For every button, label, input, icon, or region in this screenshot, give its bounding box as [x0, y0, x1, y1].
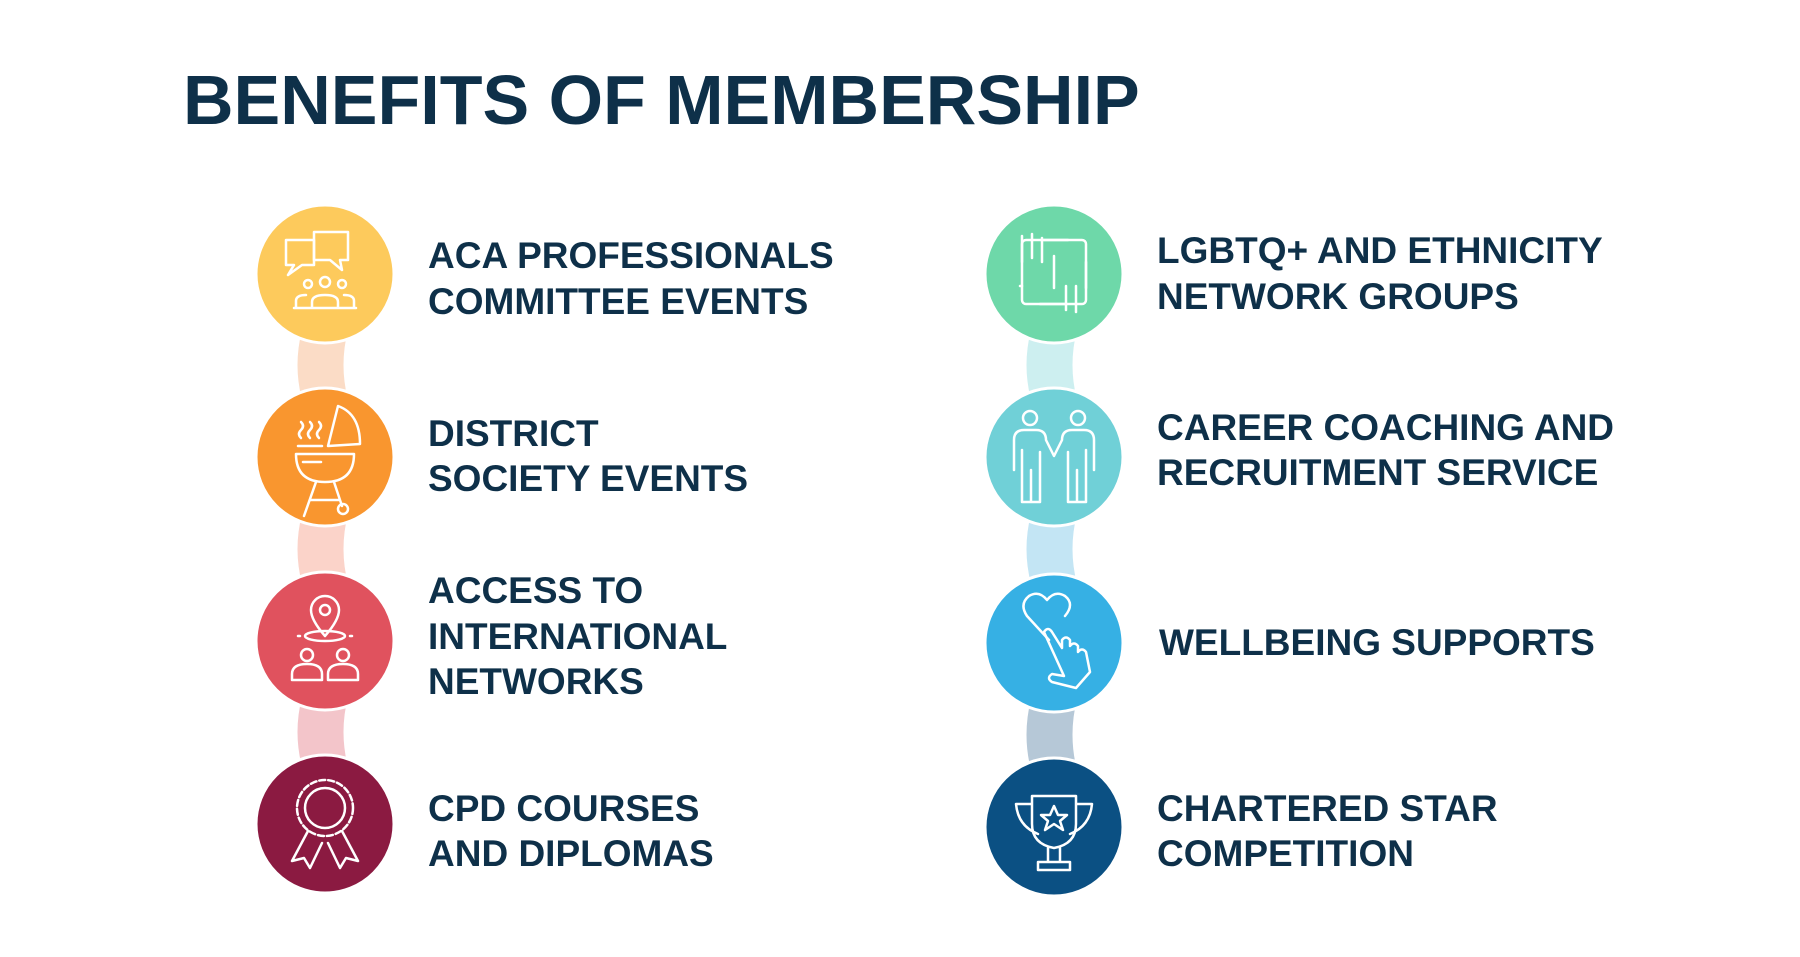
text: committee events — [428, 235, 834, 322]
text: chartered star: CHARTERED STAR — [1157, 788, 1498, 829]
text: career: RECRUITMENT SERVICE — [1157, 452, 1598, 493]
icon: trophy — [985, 758, 1123, 896]
title: BENEFITS OF MEMBERSHIP — [183, 61, 1140, 139]
text: district: SOCIETY EVENTS — [428, 458, 748, 499]
icon: hands — [985, 205, 1123, 343]
icon: heart hand — [985, 574, 1123, 712]
text: committee events: COMMITTEE EVENTS — [428, 281, 808, 322]
icon: international — [256, 572, 394, 710]
text: international: NETWORKS — [428, 661, 644, 702]
icon: bbq — [256, 388, 394, 526]
text: chartered star: COMPETITION — [1157, 833, 1414, 874]
connectors right — [1026, 330, 1077, 770]
text: wellbeing: WELLBEING SUPPORTS — [1159, 622, 1595, 663]
text: international: ACCESS TO — [428, 570, 643, 611]
text: district — [428, 413, 748, 499]
text: cpd: CPD COURSES — [428, 788, 699, 829]
text: international: INTERNATIONAL — [428, 616, 727, 657]
text: committee events: ACA PROFESSIONALS — [428, 235, 834, 276]
icon: two people — [985, 388, 1123, 526]
text: lgbtq — [1157, 230, 1603, 317]
text: cpd: AND DIPLOMAS — [428, 833, 714, 874]
text: district: DISTRICT — [428, 413, 599, 454]
text: lgbtq: NETWORK GROUPS — [1157, 276, 1519, 317]
icon: rosette — [256, 755, 394, 893]
icon: committee events — [256, 205, 394, 343]
text: chartered star — [1157, 788, 1498, 874]
text: international — [428, 570, 727, 702]
text: lgbtq: LGBTQ+ AND ETHNICITY — [1157, 230, 1603, 271]
connectors left — [298, 330, 348, 767]
text: cpd — [428, 788, 714, 874]
text: career — [1157, 407, 1614, 493]
text: career: CAREER COACHING AND — [1157, 407, 1614, 448]
